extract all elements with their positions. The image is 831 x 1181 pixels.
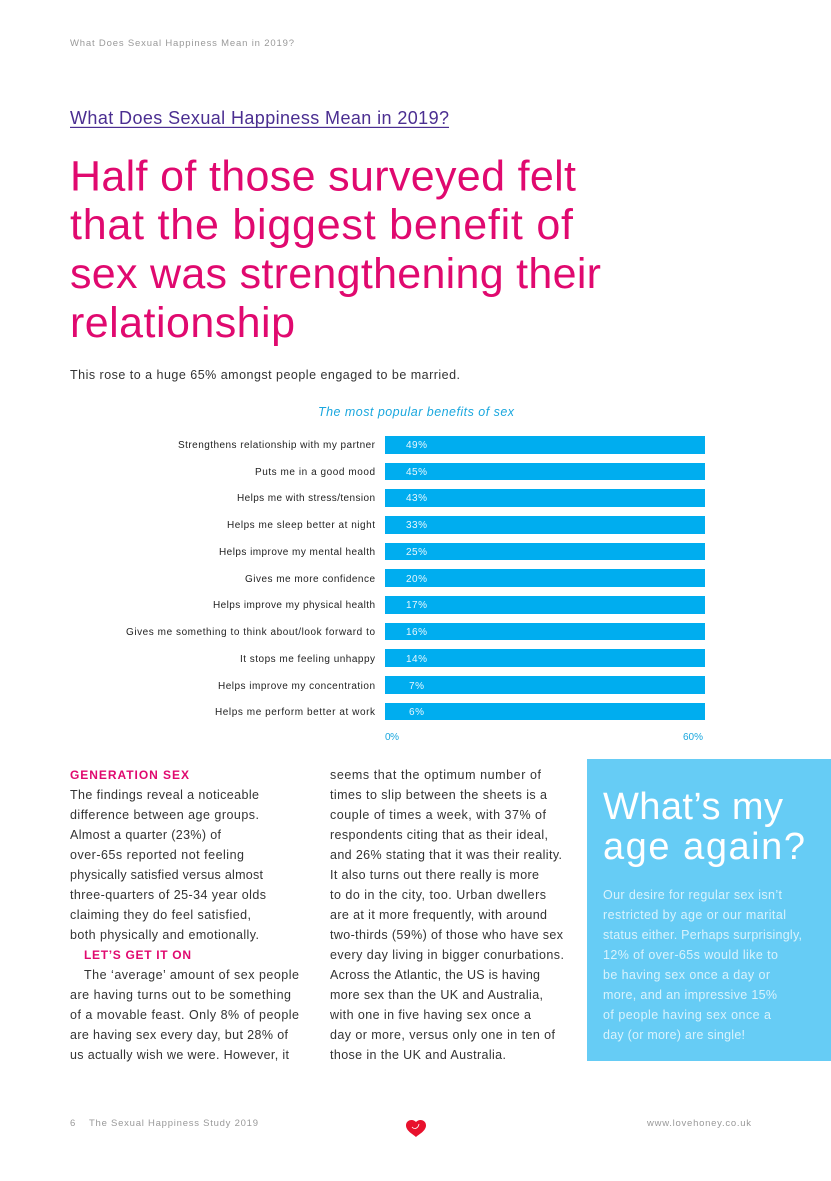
paragraph: age groups: both physically and emotionally. <box>70 928 259 942</box>
footer: page number and study name: 6 <box>70 1118 75 1129</box>
paragraph: age groups: difference between age groups. <box>70 808 259 822</box>
main title: that the biggest benefit of <box>70 201 574 249</box>
axis labels: 60% <box>683 732 703 743</box>
bar row: concentration <box>218 676 705 694</box>
bar row: concentration: Helps improve my concentration <box>218 681 375 692</box>
text column 2: It also turns out there really is more <box>330 868 539 882</box>
bar row: look forward to: Gives me something to think about/look forward to <box>126 627 375 638</box>
paragraph: age groups: three-quarters of 25-34 year olds <box>70 888 266 902</box>
main title: relationship <box>70 299 295 347</box>
panel body text: restricted by age or our marital <box>603 908 786 922</box>
bar row: perform at work: Helps me perform better at work <box>215 707 376 718</box>
bar row: physical health: 17% <box>406 600 427 611</box>
text column 2: are at it more frequently, with around <box>330 908 547 922</box>
panel body text: of people having sex once a <box>603 1008 771 1022</box>
text column 2 <box>329 768 564 1062</box>
heading: generation sex: GENERATION SEX <box>70 768 189 782</box>
text column 2: respondents citing that as their ideal, <box>330 828 548 842</box>
bar row: good mood <box>255 463 705 480</box>
section subtitle: What Does Sexual Happiness Mean in 2019? <box>70 108 449 128</box>
panel body text: Our desire for regular sex isn’t <box>603 888 783 902</box>
bar row: confidence: Gives me more confidence <box>245 574 375 585</box>
text column 2: with one in five having sex once a <box>329 1008 531 1022</box>
bar row: concentration: 7% <box>409 681 424 692</box>
text column 2: seems that the optimum number of <box>330 768 542 782</box>
panel body text: 12% of over-65s would like to <box>603 948 778 962</box>
paragraph: age groups: over-65s reported not feeling <box>70 848 244 862</box>
paragraph: age groups: The findings reveal a noticeable <box>70 788 259 802</box>
axis labels <box>385 732 703 743</box>
bar row: strengthens relationship: Strengthens relationship with my partner <box>178 440 376 451</box>
bar row: good mood: 45% <box>406 467 427 478</box>
bar row: unhappy: 14% <box>406 654 427 665</box>
axis labels: 0% <box>385 732 399 743</box>
main title <box>70 152 601 347</box>
main title: Half of those surveyed felt <box>70 152 576 200</box>
paragraph: average amount: of a movable feast. Only 8% of people <box>70 1008 299 1022</box>
paragraph: age groups <box>70 788 266 942</box>
main title: sex was strengthening their <box>70 250 601 298</box>
bar row: unhappy <box>240 649 705 667</box>
bar row: look forward to: 16% <box>406 627 427 638</box>
panel heading: What’s my <box>603 786 783 828</box>
paragraph: average amount <box>70 968 299 1062</box>
bar row: sleep <box>227 516 705 534</box>
bar row: strengthens relationship: 49% <box>406 440 427 451</box>
panel body text: status either. Perhaps surprisingly, <box>603 928 802 942</box>
panel body text: day (or more) are single! <box>603 1028 745 1042</box>
text column 2: more sex than the UK and Australia, <box>330 988 543 1002</box>
heading: let's get it on: LET’S GET IT ON <box>84 948 191 962</box>
text column 2: times to slip between the sheets is a <box>330 788 547 802</box>
panel body text <box>603 888 802 1042</box>
panel heading: age again? <box>603 826 805 868</box>
text column 2: every day living in bigger conurbations. <box>330 948 564 962</box>
bar row: stress: Helps me with stress/tension <box>237 493 375 504</box>
intro text: This rose to a huge 65% amongst people engaged to be married. <box>70 368 460 382</box>
bar row: strengthens relationship <box>178 436 705 454</box>
paragraph: age groups: physically satisfied versus almost <box>70 868 264 882</box>
bar chart: most popular benefits of sex <box>126 405 705 743</box>
bar row: perform at work <box>215 703 705 720</box>
paragraph: age groups: Almost a quarter (23%) of <box>70 828 222 842</box>
panel body text: more, and an impressive 15% <box>603 988 777 1002</box>
bar row: sleep: 33% <box>406 520 427 531</box>
running header: What Does Sexual Happiness Mean in 2019? <box>70 38 294 49</box>
bar row: mental health <box>219 543 705 560</box>
icon: heart logo <box>406 1120 426 1137</box>
text column 2: and 26% stating that it was their reality. <box>330 848 562 862</box>
text column 2: to do in the city, too. Urban dwellers <box>330 888 546 902</box>
bar row: mental health: Helps improve my mental health <box>219 547 375 558</box>
bar row: perform at work: 6% <box>409 707 424 718</box>
bar row: good mood: Puts me in a good mood <box>255 467 375 478</box>
bar row: confidence <box>245 569 705 587</box>
text column 2: two-thirds (59%) of those who have sex <box>330 928 564 942</box>
text column 2: couple of times a week, with 37% of <box>330 808 547 822</box>
bar row: mental health: 25% <box>406 547 427 558</box>
bar row: physical health <box>213 596 705 614</box>
bar row: stress: 43% <box>406 493 427 504</box>
panel heading <box>603 786 805 868</box>
paragraph: age groups: claiming they do feel satisfied, <box>70 908 251 922</box>
bar row: physical health: Helps improve my physical health <box>213 600 375 611</box>
panel: what's my age again <box>587 759 831 1061</box>
footer: page number and study name: The Sexual Happiness Study 2019 <box>89 1118 258 1129</box>
paragraph: average amount: The ‘average’ amount of sex people <box>84 968 299 982</box>
bar row: stress <box>237 489 705 507</box>
bar row: sleep: Helps me sleep better at night <box>227 520 375 531</box>
text column 1 <box>70 768 299 1062</box>
chart title: The most popular benefits of sex <box>318 405 515 419</box>
bar row: look forward to <box>126 623 705 640</box>
text column 2: those in the UK and Australia. <box>330 1048 506 1062</box>
bar row: confidence: 20% <box>406 574 427 585</box>
paragraph: average amount: are having turns out to be something <box>70 988 291 1002</box>
footer: website: www.lovehoney.co.uk <box>646 1118 751 1129</box>
text column 2: day or more, versus only one in ten of <box>330 1028 556 1042</box>
paragraph: average amount: are having sex every day, but 28% of <box>70 1028 289 1042</box>
panel body text: be having sex once a day or <box>603 968 770 982</box>
text column 2: Across the Atlantic, the US is having <box>330 968 540 982</box>
bar row: unhappy: It stops me feeling unhappy <box>240 654 375 665</box>
paragraph: average amount: us actually wish we were. However, it <box>70 1048 290 1062</box>
